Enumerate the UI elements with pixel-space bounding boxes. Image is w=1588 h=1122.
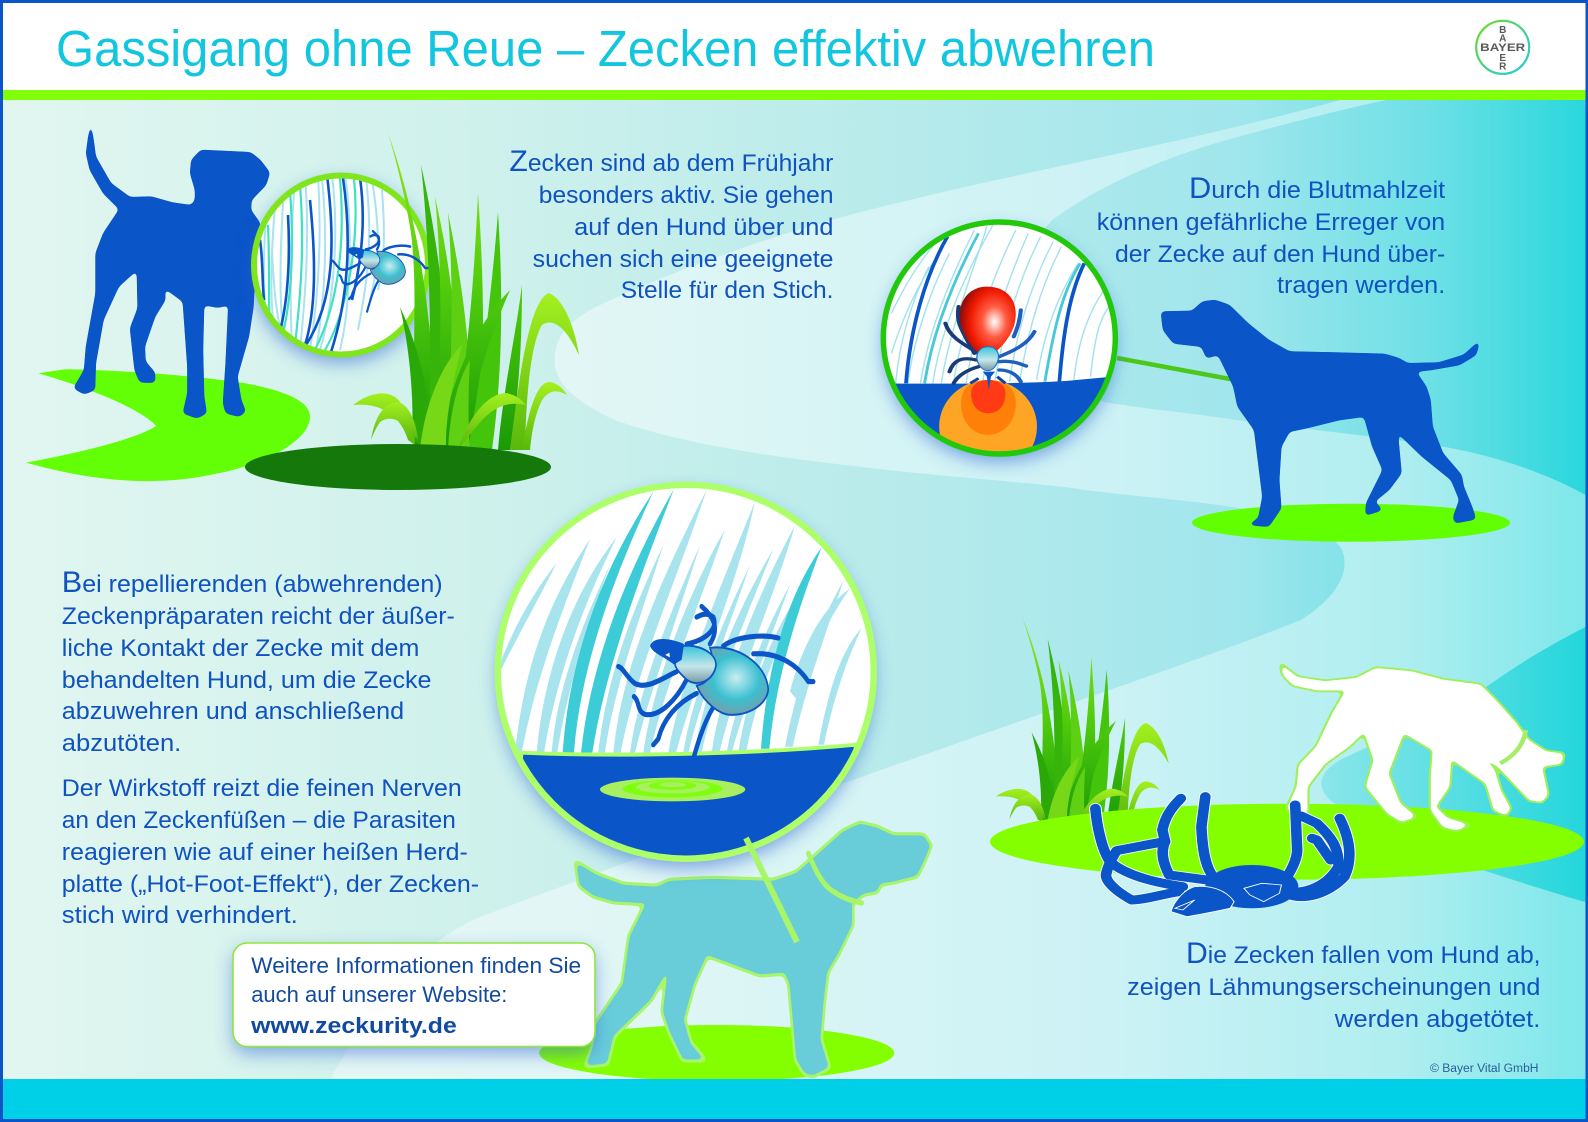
ground ellipse 2 [1192, 504, 1510, 542]
magnifier bubble 3 [498, 485, 880, 885]
dark ground ellipse [245, 444, 551, 490]
text block: repellierende Zeckenpräparate: abzuwehren und anschließend [62, 698, 404, 725]
ground ellipse 3 [539, 1025, 894, 1081]
bayer logo [1476, 21, 1529, 74]
magnifier bubble 1 [252, 175, 430, 363]
ground ellipse 4 [990, 804, 1584, 880]
header panel [3, 3, 1586, 90]
collar [1500, 730, 1526, 763]
text block: Blutmahlzeit: tragen werden. [1277, 272, 1445, 299]
green header bar [3, 90, 1586, 100]
text block: Zecken sind aktiv [509, 145, 834, 304]
text block: Zecken fallen ab: werden abgetötet. [1334, 1006, 1540, 1033]
dog 3 outline [577, 824, 930, 1075]
large tick [618, 606, 813, 771]
text block: repellierende Zeckenpräparate: platte („Hot-Foot-Effekt“), der Zecken- [62, 871, 479, 898]
bayer logo: E [1499, 53, 1506, 64]
text block: repellierende Zeckenpräparate: behandelten Hund, um die Zecke [62, 667, 432, 694]
bayer logo: R [1499, 62, 1507, 73]
info box: Weitere Informationen finden Sie [251, 953, 581, 978]
leash line bubble 3 to dog 3 [746, 838, 797, 942]
text block: repellierende Zeckenpräparate: Zeckenpräparaten reicht der äußer- [62, 603, 455, 630]
small tick [332, 231, 428, 312]
copyright: © Bayer Vital GmbH [1430, 1063, 1538, 1075]
text block: repellierende Zeckenpräparate: stich wird verhindert. [62, 902, 298, 929]
bayer logo: BAYER [1480, 42, 1525, 54]
text block: Zecken fallen ab: zeigen Lähmungserscheinungen und [1127, 974, 1540, 1001]
engorged tick [945, 287, 1034, 390]
title: Gassigang ohne Reue – Zecken effektiv abwehren [56, 20, 1155, 77]
text block: repellierende Zeckenpräparate: liche Kontakt der Zecke mit dem [62, 635, 419, 662]
text block: repellierende Zeckenpräparate: Bei repellierenden (abwehrenden) [62, 566, 443, 599]
text block: Zecken sind aktiv: suchen sich eine geeignete [533, 246, 834, 273]
text block: repellierende Zeckenpräparate: abzutöten. [62, 730, 181, 757]
text block: Blutmahlzeit: können gefährliche Erreger von [1097, 209, 1445, 236]
text block: Zecken sind aktiv: Stelle für den Stich. [621, 277, 834, 304]
text block: repellierende Zeckenpräparate: reagieren wie auf einer heißen Herd- [62, 839, 468, 866]
text block: Zecken sind aktiv: auf den Hund über und [574, 214, 834, 241]
ground patch 1 [26, 369, 310, 481]
collar [808, 854, 862, 903]
text block: repellierende Zeckenpräparate [62, 566, 479, 929]
text block: Blutmahlzeit: der Zecke auf den Hund über- [1115, 241, 1445, 268]
dog 2 silhouette [1161, 300, 1480, 527]
dead tick on its back [1095, 797, 1349, 917]
info box: auch auf unserer Website: [251, 982, 507, 1007]
magnifier bubble 2 [875, 222, 1119, 473]
text block: Zecken sind aktiv: besonders aktiv. Sie gehen [539, 182, 834, 209]
bottom bar [3, 1079, 1586, 1119]
dog 1 silhouette [73, 120, 270, 418]
bayer logo: B [1499, 25, 1506, 36]
leash line to dog 2 [1117, 358, 1246, 382]
text block: Blutmahlzeit [1097, 172, 1445, 299]
text block: Zecken sind aktiv: Zecken sind ab dem Frühjahr [509, 145, 833, 178]
white dog sniffing [1281, 665, 1563, 830]
text block: repellierende Zeckenpräparate: Der Wirkstoff reizt die feinen Nerven [62, 775, 462, 802]
bayer logo: A [1499, 34, 1506, 45]
text block: Blutmahlzeit: Durch die Blutmahlzeit [1189, 172, 1445, 205]
text block: repellierende Zeckenpräparate: an den Zeckenfüßen – die Parasiten [62, 807, 456, 834]
info box [233, 943, 595, 1054]
grass clump 2 [996, 618, 1169, 826]
ripple target [600, 778, 745, 801]
grass clump 1 [353, 133, 579, 450]
info box: www.zeckurity.de [250, 1013, 457, 1038]
text block: Zecken fallen ab: Die Zecken fallen vom Hund ab, [1186, 937, 1540, 970]
text block: Zecken fallen ab [1127, 937, 1540, 1033]
